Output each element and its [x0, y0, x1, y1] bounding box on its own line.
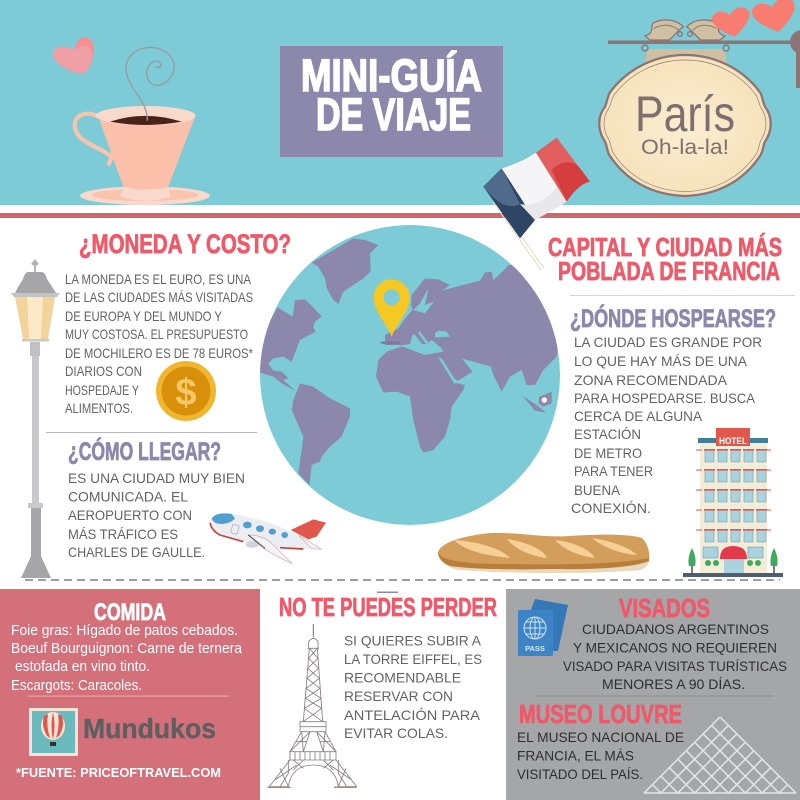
Mediterranean: [400, 332, 443, 355]
source note: *FUENTE: PRICEOFTRAVEL.COM: [16, 766, 221, 780]
text block: platos: Escargots: Caracoles.: [11, 678, 142, 694]
icon: Louvre pyramid: [644, 717, 796, 793]
red band: [0, 213, 800, 218]
text block: moneda: [65, 271, 253, 416]
text block: visados: VISADO PARA VISITAS TURÍSTICAS: [563, 658, 787, 674]
icon: hotel: HOTEL: [719, 436, 747, 447]
text block: visados: CIUDADANOS ARGENTINOS: [582, 621, 769, 637]
icon: passports: PASS: [525, 644, 545, 653]
heading: visados: VISADOS: [619, 593, 710, 623]
icon: French flag: [483, 138, 590, 270]
icon: hearts on sign: [711, 0, 799, 40]
text block: hospedaje: LA CIUDAD ES GRANDE POR: [574, 334, 762, 350]
heading: moneda y costo: ¿MONEDA Y COSTO?: [79, 229, 291, 259]
text block: hospedaje: ESTACIÓN: [574, 426, 641, 442]
ornament: [645, 20, 725, 40]
text block: visados: MENORES A 90 DÍAS.: [602, 676, 745, 692]
text block: hospedaje: PARA TENER: [574, 463, 653, 479]
text block: platos: Foie gras: Hígado de patos cebados.: [11, 623, 238, 639]
North America: [253, 299, 322, 391]
text block: torre eiffel: EVITAR COLAS.: [344, 725, 448, 741]
icon: baguette: [438, 533, 649, 573]
world map globe: [253, 225, 560, 525]
title: MINI-GUÍA: [301, 50, 482, 101]
text block: hospedaje: ZONA RECOMENDADA: [574, 372, 728, 388]
Eurasia and Africa: [376, 265, 560, 453]
text block: moneda: ALIMENTOS.: [65, 400, 133, 416]
hanging sign: París: [599, 20, 800, 196]
icon: street lamp: [11, 259, 60, 578]
text block: torre eiffel: [344, 632, 482, 741]
text block: cómo llegar: COMUNICADA. EL: [68, 488, 188, 504]
sign board: [599, 55, 771, 196]
icon: coffee cup: [75, 47, 210, 205]
Greenland: [312, 238, 378, 304]
heading: no te puedes perder: NO TE PUEDES PERDER: [279, 592, 497, 622]
text block: cómo llegar: ES UNA CIUDAD MUY BIEN: [68, 470, 245, 486]
icon: coin: [156, 361, 216, 421]
logo text: Mundukos: [83, 713, 216, 744]
Spain: [380, 341, 401, 344]
panel: visados y museo: [506, 589, 800, 800]
text block: torre eiffel: LA TORRE EIFFEL, ES: [344, 651, 482, 667]
text block: moneda: DE MOCHILERO ES DE 78 EUROS*: [65, 345, 253, 361]
title: [280, 46, 503, 157]
header background: [0, 0, 800, 205]
text block: moneda: DE LAS CIUDADES MÁS VISITADAS: [65, 289, 253, 305]
Black sea: [435, 331, 450, 337]
South America: [292, 383, 350, 485]
sign text: Oh-la-la!: [641, 136, 729, 159]
sign text: París: [635, 86, 735, 142]
text block: hospedaje: CERCA DE ALGUNA: [574, 408, 703, 424]
Indonesia: [523, 396, 546, 413]
text block: hospedaje: LO QUE HAY MÁS DE UNA: [574, 353, 748, 369]
Baltic sea: [413, 288, 434, 313]
icon: heart near cup: [53, 37, 94, 74]
icon: coin: $: [175, 372, 197, 414]
text block: cómo llegar: MÁS TRÁFICO ES: [68, 526, 178, 542]
title: DE VIAJE: [316, 89, 471, 140]
text block: platos: estofada en vino tinto.: [15, 659, 150, 675]
text block: torre eiffel: SI QUIERES SUBIR A: [344, 632, 482, 648]
text block: moneda: HOSPEDAJE Y: [65, 382, 139, 398]
text block: museo: FRANCIA, EL MÁS: [517, 748, 634, 764]
heading: cómo llegar: ¿CÓMO LLEGAR?: [68, 436, 221, 466]
text block: museo: EL MUSEO NACIONAL DE: [517, 729, 684, 745]
Red sea: [438, 358, 458, 384]
heading: museo louvre: MUSEO LOUVRE: [519, 699, 682, 729]
text block: moneda: DIARIOS CON: [65, 363, 142, 379]
icon: passports: [518, 599, 568, 656]
text block: museo: [517, 729, 684, 782]
icon: hotel: [683, 428, 783, 577]
panel: comida: [0, 589, 260, 800]
text block: hospedaje: PARA HOSPEDARSE. BUSCA: [574, 390, 756, 406]
panel: no te puedes perder: [267, 592, 497, 787]
map pin: [374, 279, 410, 337]
icon: Eiffel tower: [267, 624, 357, 787]
Italy: [414, 332, 426, 344]
text block: hospedaje: CONEXIÓN.: [571, 500, 651, 516]
text block: torre eiffel: RECOMENDABLE: [344, 670, 461, 686]
sign text: [635, 86, 735, 159]
text block: museo: VISITADO DEL PAÍS.: [517, 766, 643, 782]
icon: balloon stamp: [29, 708, 78, 756]
heading: capital: [548, 232, 782, 286]
text block: moneda: LA MONEDA ES EL EURO, ES UNA: [65, 271, 252, 287]
text block: hospedaje: BUENA: [574, 482, 621, 498]
heading: comida: COMIDA: [94, 599, 166, 626]
text block: hospedaje: [571, 334, 762, 516]
text block: torre eiffel: RESERVAR CON: [344, 688, 453, 704]
icon: airplane: [210, 513, 326, 564]
text block: moneda: MUY COSTOSA. EL PRESUPUESTO: [65, 326, 248, 342]
text block: visados: [563, 621, 787, 692]
text block: hospedaje: DE METRO: [574, 445, 642, 461]
text block: cómo llegar: CHARLES DE GAULLE.: [68, 544, 205, 560]
text block: moneda: DE EUROPA Y DEL MUNDO Y: [65, 308, 223, 324]
text block: platos: Boeuf Bourguignon: Carne de ternera: [11, 641, 243, 657]
text block: visados: Y MEXICANOS NO REQUIEREN: [573, 640, 777, 656]
text block: platos: [11, 623, 243, 694]
text block: cómo llegar: AEROPUERTO CON: [68, 507, 192, 523]
text block: torre eiffel: ANTELACIÓN PARA: [344, 707, 481, 723]
text block: cómo llegar: [68, 470, 245, 560]
